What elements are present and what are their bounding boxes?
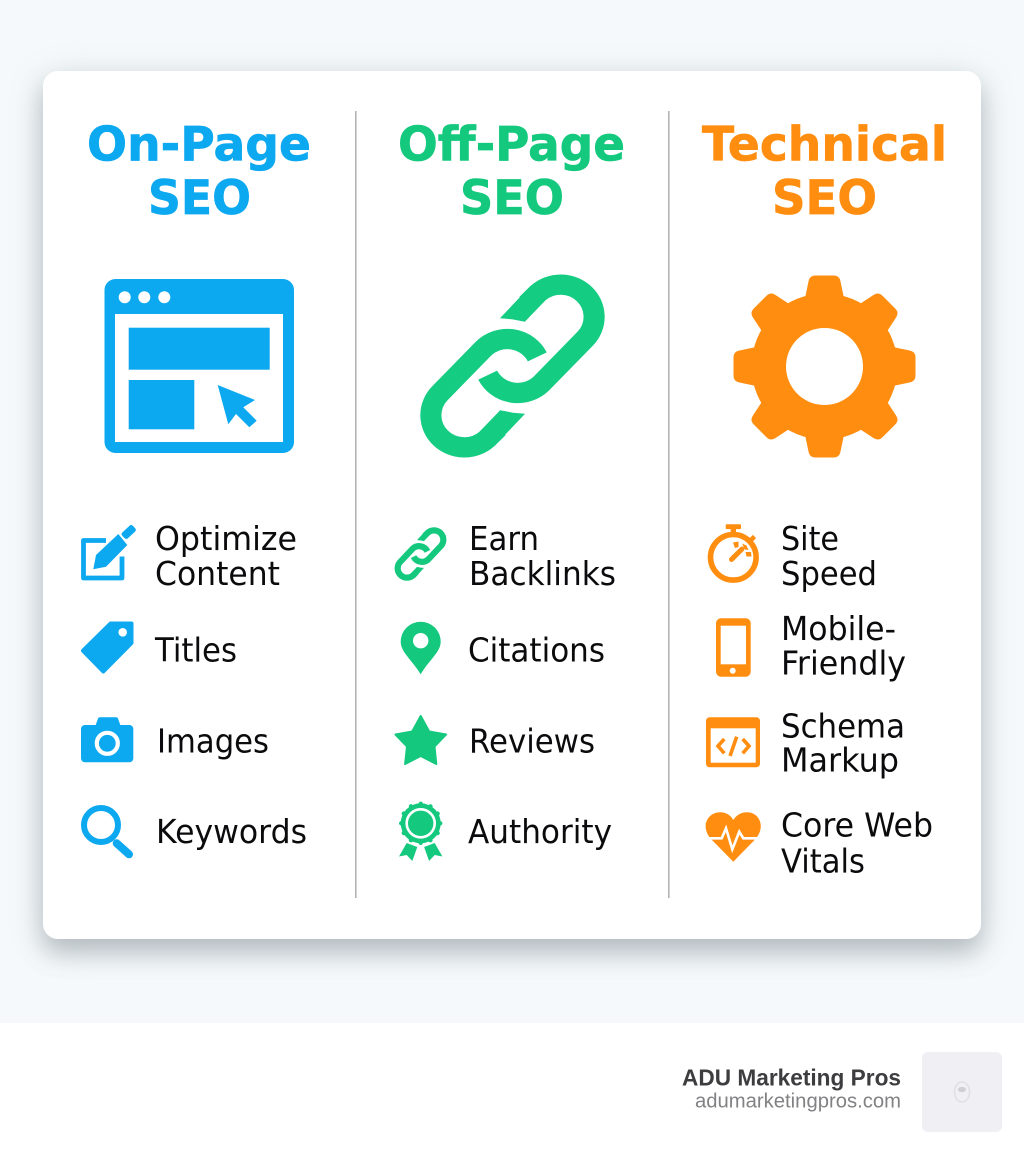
heading: Technical SEO: Technical (702, 118, 947, 172)
footer brand (682, 1052, 1002, 1132)
icon: browser window with cursor (104, 279, 294, 453)
item: Keywords (84, 808, 307, 854)
item: Titles (83, 624, 237, 672)
item: Images: Images (157, 722, 269, 761)
icon: award badge (399, 803, 442, 861)
item: Schema Markup: Schema (781, 706, 905, 745)
item: Earn Backlinks (398, 519, 616, 593)
item: Schema Markup (706, 706, 905, 780)
panel: Technical SEO (702, 118, 947, 881)
item: Authority: Authority (468, 812, 612, 851)
icon: code window (706, 717, 760, 767)
item: Earn Backlinks: Earn (469, 519, 539, 558)
heading: Off-Page SEO: SEO (460, 171, 564, 226)
item: Titles: Titles (154, 631, 237, 670)
icon: map pin (401, 622, 441, 674)
item: Citations: Citations (468, 631, 605, 670)
icon: magnifier (84, 808, 129, 854)
item: Reviews (396, 716, 595, 764)
item: Mobile-Friendly: Friendly (781, 644, 906, 682)
icon: edit pencil (84, 524, 137, 578)
heading: On-Page SEO (87, 118, 311, 226)
heading: Off-Page SEO (398, 118, 625, 226)
item: Optimize Content: Content (155, 554, 280, 593)
item: Site Speed (710, 519, 877, 593)
icon: camera (81, 717, 133, 762)
brand name: ADU Marketing Pros (682, 1064, 901, 1090)
item: Earn Backlinks: Backlinks (469, 554, 616, 593)
item: Mobile-Friendly: Mobile- (781, 609, 896, 648)
icon: heart with pulse (706, 812, 761, 862)
heading: On-Page SEO: SEO (148, 171, 251, 226)
panel: Off-Page SEO (396, 118, 625, 861)
heading: On-Page SEO: On-Page (87, 118, 311, 172)
heading: Technical SEO (702, 118, 947, 226)
heading: Off-Page SEO: Off-Page (398, 118, 625, 172)
heading: Technical SEO: SEO (772, 171, 877, 226)
icon: stopwatch (710, 524, 756, 580)
icon: chain link (431, 285, 594, 447)
card (43, 71, 981, 939)
item: Site Speed: Site (781, 519, 839, 558)
brand url: adumarketingpros.com (695, 1090, 901, 1112)
panel: On-Page SEO (81, 118, 311, 854)
item: Mobile-Friendly (716, 609, 906, 682)
item: Core Web Vitals: Core Web (781, 806, 933, 845)
item: Optimize Content (84, 519, 297, 593)
item: Reviews: Reviews (469, 722, 595, 761)
item: Images (81, 717, 269, 762)
item: Schema Markup: Markup (781, 741, 899, 780)
item: Core Web Vitals (706, 806, 933, 881)
item: Optimize Content: Optimize (155, 519, 297, 558)
item: Site Speed: Speed (781, 554, 877, 593)
item: Authority (399, 803, 612, 861)
item: Core Web Vitals: Vitals (781, 842, 865, 881)
icon: star (396, 716, 446, 764)
icon: gear (734, 276, 916, 458)
item: Citations (401, 622, 605, 674)
icon: smartphone (716, 618, 751, 677)
icon: small chain link (398, 530, 443, 578)
item: Keywords: Keywords (156, 812, 307, 851)
logo placeholder (922, 1052, 1002, 1132)
icon: tag (83, 624, 132, 672)
